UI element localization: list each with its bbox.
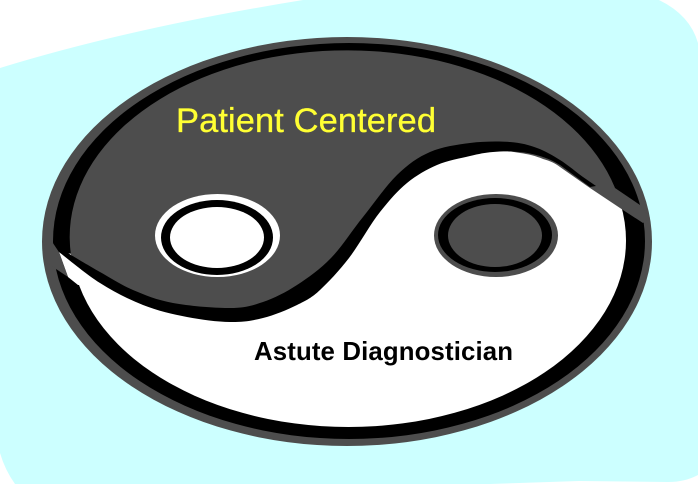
label: Astute Diagnostician: Astute Diagnostician: [254, 338, 513, 366]
left grey notch: [44, 243, 68, 277]
right eye: grey dot: [434, 194, 558, 277]
dark grey upper half: [70, 50, 650, 315]
white sliver at left: [59, 252, 90, 285]
black ring: [53, 43, 645, 439]
yin-yang symbol: [42, 37, 652, 446]
white lower half: [71, 54, 626, 427]
left eye: white dot: [155, 194, 280, 277]
black S-curve divider: [53, 142, 596, 322]
label: Patient Centered: Patient Centered: [176, 102, 436, 140]
outer grey rim: [42, 37, 652, 446]
